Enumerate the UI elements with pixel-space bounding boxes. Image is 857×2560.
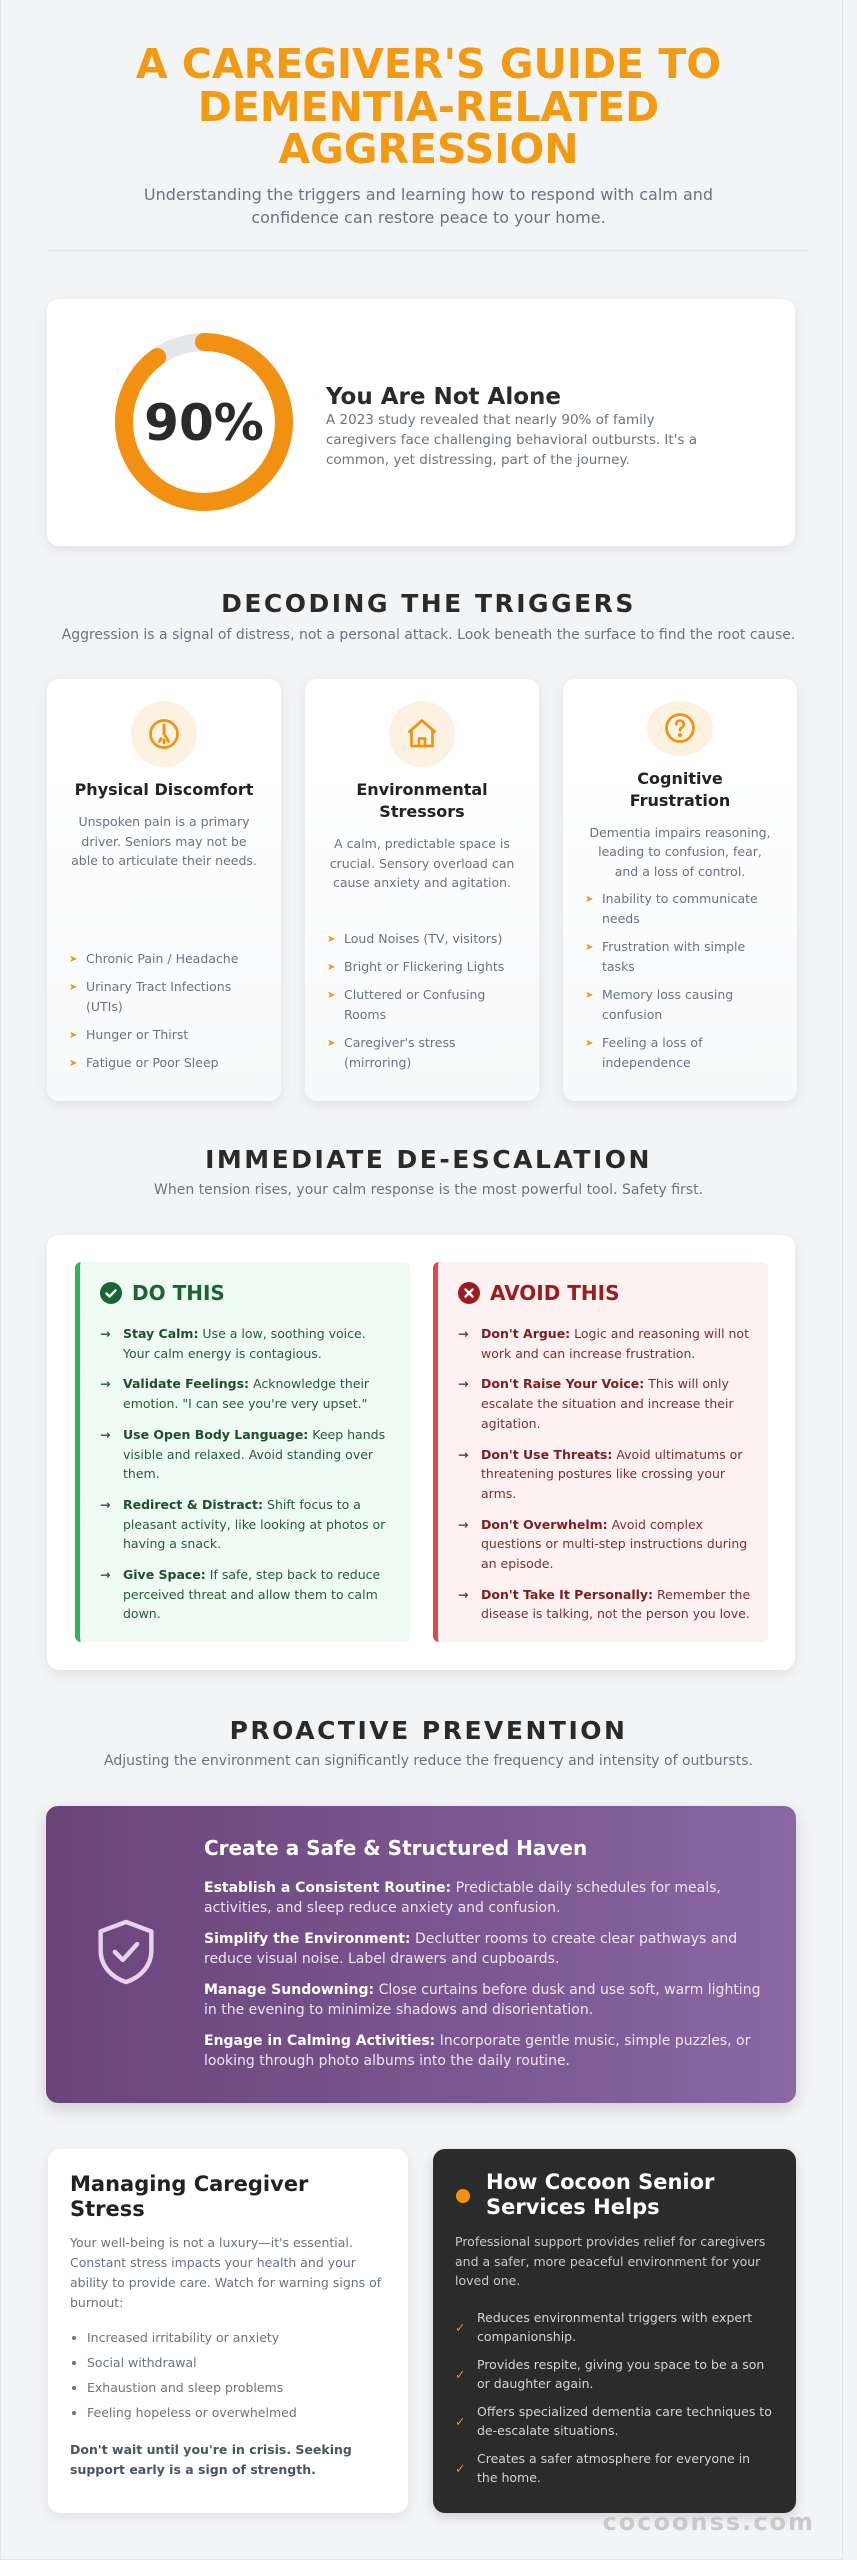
list: Creates a safer atmosphere for everyone in the home. [477, 2450, 750, 2485]
list: Inability to communicate needs [602, 891, 758, 926]
footer: watermark: cocoonss.com [603, 2508, 815, 2536]
card text: A calm, predictable space is crucial. Sensory overload can cause anxiety and agitation. [330, 836, 514, 890]
list: Don't Use Threats: Avoid ultimatums or threatening postures like crossing your arms. [481, 1447, 742, 1501]
panel: environmental stressors [305, 679, 539, 1101]
list: Feeling a loss of independence [602, 1035, 702, 1070]
chart: 90% ring: 90% [144, 394, 264, 452]
list: Loud Noises (TV, visitors) [344, 931, 502, 946]
card title: Stressors [379, 802, 465, 821]
heading [70, 2172, 308, 2221]
list: Manage Sundowning: Close curtains before dusk and use soft, warm lighting in the evening to minimize shadows and disorientation. [204, 1982, 760, 2018]
panel: do this [75, 1262, 410, 1642]
text: Professional support provides relief for caregivers and a safer, more peaceful environment for your loved one. [455, 2234, 765, 2288]
panel: safe haven [46, 1806, 796, 2103]
list: Give Space: If safe, step back to reduce perceived threat and allow them to calm down. [123, 1567, 380, 1621]
icon: question [647, 701, 713, 756]
title: AGGRESSION [278, 125, 579, 173]
card title: Physical Discomfort [75, 780, 253, 799]
list: Bright or Flickering Lights [344, 959, 504, 974]
stat heading: You Are Not Alone [326, 384, 561, 410]
heading: Services Helps [486, 2195, 660, 2219]
list [72, 2330, 297, 2420]
list: Simplify the Environment: Declutter rooms to create clear pathways and reduce visual noise. Label drawers and cupboards. [204, 1931, 737, 1967]
list: ✓ [455, 2414, 465, 2428]
header: DO THIS [132, 1281, 225, 1305]
header: AVOID THIS [490, 1281, 619, 1305]
list: Chronic Pain / Headache [86, 951, 238, 966]
icon: clock [131, 701, 197, 767]
subheading: Adjusting the environment can significantly reduce the frequency and intensity of outbursts. [104, 1753, 753, 1769]
card text: Dementia impairs reasoning, leading to confusion, fear, and a loss of control. [589, 824, 771, 878]
list: ✓ [455, 2320, 465, 2334]
heading: decoding the triggers: DECODING THE TRIGGERS [221, 589, 636, 618]
callout: Don't wait until you're in crisis. Seeking support early is a sign of strength. [70, 2442, 352, 2477]
heading: Managing Caregiver [70, 2172, 308, 2196]
list [100, 1326, 386, 1621]
heading [456, 2170, 714, 2219]
list: Stay Calm: Use a low, soothing voice. Your calm energy is contagious. [123, 1326, 366, 1361]
list: Redirect & Distract: Shift focus to a pleasant activity, like looking at photos or having a snack. [123, 1497, 385, 1551]
list: Fatigue or Poor Sleep [86, 1055, 219, 1070]
panel: avoid this [433, 1262, 768, 1642]
list: Caregiver's stress (mirroring) [344, 1035, 456, 1070]
list: Provides respite, giving you space to be a son or daughter again. [477, 2356, 764, 2391]
list [458, 1326, 750, 1621]
list: Use Open Body Language: Keep hands visible and relaxed. Avoid standing over them. [123, 1427, 385, 1481]
chart: 90% ring [115, 333, 293, 511]
list: Increased irritability or anxiety [87, 2330, 279, 2345]
list [586, 891, 758, 1070]
list: Feeling hopeless or overwhelmed [87, 2405, 297, 2420]
title: A CAREGIVER'S GUIDE TO [136, 40, 721, 88]
card title [356, 780, 488, 821]
list: Don't Overwhelm: Avoid complex questions or multi-step instructions during an episode. [481, 1517, 747, 1571]
list: Don't Take It Personally: Remember the disease is talking, not the person you love. [481, 1587, 750, 1621]
text: Your well-being is not a luxury—it's essential. Constant stress impacts your health and your ability to provide care. Watch for warning signs of burnout: [70, 2235, 381, 2310]
list: Memory loss causing confusion [602, 987, 733, 1022]
subheading: When tension rises, your calm response is the most powerful tool. Safety first. [154, 1182, 703, 1198]
subtitle: Understanding the triggers and learning how to respond with calm and confidence can restore peace to your home. [144, 185, 713, 227]
panel: cocoon services [433, 2149, 796, 2513]
list: Don't Argue: Logic and reasoning will not work and can increase frustration. [481, 1326, 749, 1361]
list [455, 2310, 772, 2485]
list: ✓ [455, 2460, 465, 2476]
card title [630, 768, 730, 810]
stat text: A 2023 study revealed that nearly 90% of family caregivers face challenging behavioral outbursts. It's a common, yet distressing, part of the journey. [326, 412, 697, 468]
list: Hunger or Thirst [86, 1027, 188, 1042]
list: Cluttered or Confusing Rooms [344, 987, 485, 1022]
list: Establish a Consistent Routine: Predictable daily schedules for meals, activities, and sleep reduce anxiety and confusion. [204, 1880, 721, 1916]
title [136, 40, 721, 173]
heading: How Cocoon Senior [486, 2170, 714, 2194]
list: Exhaustion and sleep problems [87, 2380, 283, 2395]
list: Frustration with simple tasks [602, 939, 745, 974]
list: Don't Raise Your Voice: This will only escalate the situation and increase their agitation. [481, 1376, 734, 1431]
list [204, 1880, 760, 2069]
icon: shield [98, 1920, 154, 1984]
panel: physical discomfort [47, 679, 281, 1101]
list [70, 951, 238, 1070]
list: Reduces environmental triggers with expert companionship. [477, 2310, 752, 2344]
heading: Create a Safe & Structured Haven [204, 1836, 587, 1860]
panel: cognitive frustration [563, 679, 797, 1101]
list: Engage in Calming Activities: Incorporate gentle music, simple puzzles, or looking through photo albums into the daily routine. [204, 2033, 750, 2069]
card title: Frustration [630, 790, 730, 810]
card title: Cognitive [637, 768, 723, 788]
panel: caregiver stress [48, 2149, 408, 2513]
list: Urinary Tract Infections (UTIs) [86, 979, 231, 1014]
card text: Unspoken pain is a primary driver. Seniors may not be able to articulate their needs. [71, 814, 257, 868]
card title: Environmental [356, 780, 488, 799]
list [328, 931, 504, 1070]
heading: proactive prevention: PROACTIVE PREVENTION [230, 1716, 627, 1745]
heading: Stress [70, 2197, 145, 2221]
title: DEMENTIA-RELATED [198, 82, 659, 130]
subheading: Aggression is a signal of distress, not a personal attack. Look beneath the surface to find the root cause. [62, 627, 795, 643]
list: Social withdrawal [87, 2355, 197, 2370]
list: ✓ [455, 2366, 465, 2382]
icon: house [389, 701, 455, 767]
panel: de-escalation box [47, 1235, 795, 1670]
list: Offers specialized dementia care techniques to de-escalate situations. [477, 2404, 772, 2438]
list: Validate Feelings: Acknowledge their emotion. "I can see you're very upset." [123, 1376, 369, 1411]
panel: stat card [47, 299, 795, 546]
heading: immediate de-escalation: IMMEDIATE DE-ESCALATION [205, 1145, 652, 1174]
